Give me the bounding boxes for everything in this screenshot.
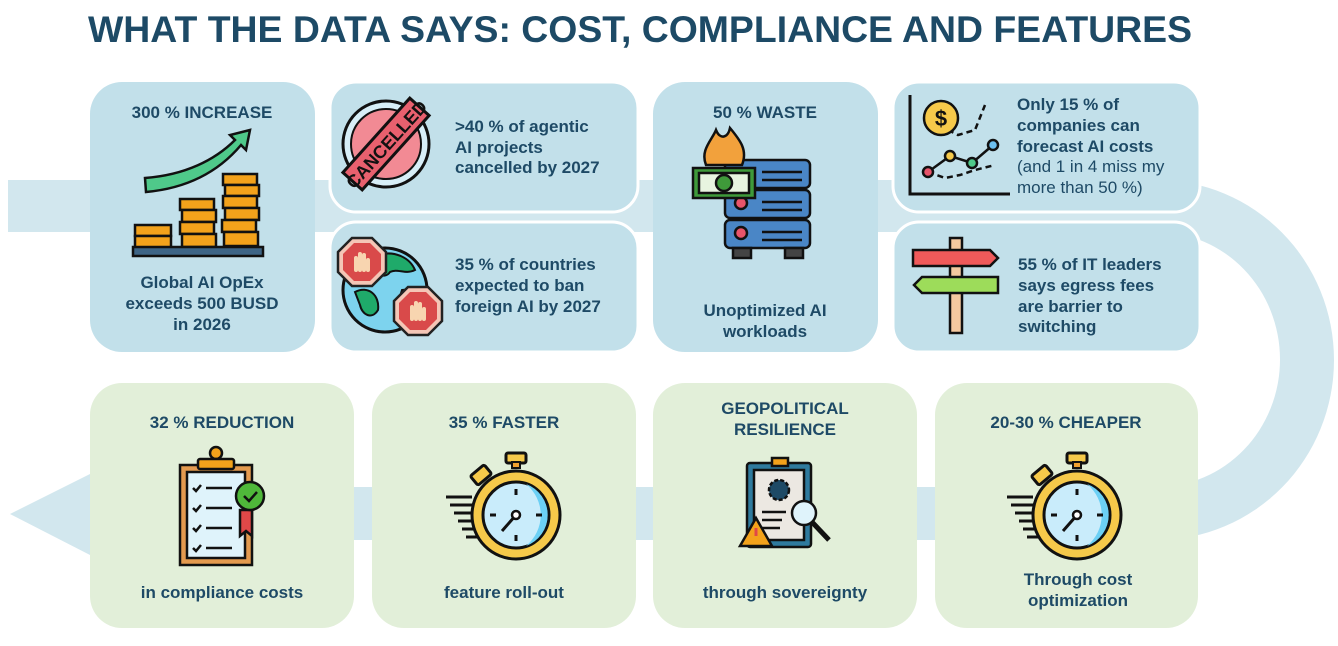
panel: 35% faster bbox=[372, 383, 636, 628]
icon: burning money server bbox=[693, 128, 810, 258]
icon: globe with stop signs bbox=[338, 238, 442, 335]
icon: signpost bbox=[913, 238, 998, 333]
panel: 50% waste bbox=[653, 82, 878, 352]
panel: countries banning foreign AI: expected to ban bbox=[455, 276, 584, 295]
panel: 32% reduction: 32 % REDUCTION bbox=[150, 413, 294, 432]
panel: egress fees bbox=[893, 222, 1200, 352]
panel: 300% increase: exceeds 500 BUSD bbox=[125, 294, 279, 313]
title: WHAT THE DATA SAYS: COST, COMPLIANCE AND FEATURES bbox=[88, 9, 1192, 50]
panel: geopolitical resilience: GEOPOLITICAL bbox=[721, 399, 849, 418]
icon: cancelled stamp: CANCELLED bbox=[342, 97, 431, 193]
panel: egress fees: 55 % of IT leaders bbox=[1018, 255, 1162, 274]
panel: forecasting AI costs: more than 50 %) bbox=[1017, 178, 1143, 197]
panel: 20-30% cheaper: optimization bbox=[1028, 591, 1128, 610]
icon: document with gear and magnifier bbox=[740, 458, 829, 547]
panel: 35% faster: feature roll-out bbox=[444, 583, 564, 602]
panel: 20-30% cheaper: Through cost bbox=[1024, 570, 1133, 589]
icon: stopwatch bbox=[1007, 453, 1121, 559]
panel: countries banning foreign AI: foreign AI by 2027 bbox=[455, 297, 601, 316]
icon: stopwatch bbox=[446, 453, 560, 559]
panel: 300% increase bbox=[90, 82, 315, 352]
panel: 50% waste: 50 % WASTE bbox=[713, 103, 817, 122]
panel: egress fees: says egress fees bbox=[1018, 276, 1154, 295]
panel: 300% increase: Global AI OpEx bbox=[140, 273, 264, 292]
panel: cancelled projects: AI projects bbox=[455, 138, 543, 157]
panel: geopolitical resilience bbox=[653, 383, 917, 628]
panel: 300% increase: 300 % INCREASE bbox=[132, 103, 272, 122]
panel: egress fees: switching bbox=[1018, 317, 1096, 336]
panel: 50% waste: workloads bbox=[722, 322, 807, 341]
panel: countries banning foreign AI bbox=[330, 222, 638, 352]
panel: countries banning foreign AI: 35 % of countries bbox=[455, 255, 596, 274]
panel: forecasting AI costs bbox=[893, 82, 1200, 212]
icon: chart with dollar bbox=[910, 95, 1010, 194]
icon: coins with arrow bbox=[133, 130, 263, 256]
panel: 32% reduction bbox=[90, 383, 354, 628]
panel: 50% waste: Unoptimized AI bbox=[703, 301, 827, 320]
panel: cancelled projects bbox=[330, 82, 638, 212]
panel: cancelled projects: >40 % of agentic bbox=[455, 117, 589, 136]
panel: geopolitical resilience: through sovereignty bbox=[703, 583, 868, 602]
panel: geopolitical resilience: RESILIENCE bbox=[734, 420, 836, 439]
icon: chart with dollar: $ bbox=[935, 106, 947, 131]
icon: clipboard with badge bbox=[180, 447, 264, 565]
panel: 32% reduction: in compliance costs bbox=[141, 583, 303, 602]
panel: 20-30% cheaper: 20-30 % CHEAPER bbox=[990, 413, 1142, 432]
panel: forecasting AI costs: forecast AI costs bbox=[1017, 137, 1153, 156]
panel: forecasting AI costs: companies can bbox=[1017, 116, 1140, 135]
panel: egress fees: are barrier to bbox=[1018, 297, 1123, 316]
flow band (background path) bbox=[8, 180, 1334, 555]
panel: forecasting AI costs: (and 1 in 4 miss my bbox=[1017, 157, 1165, 176]
panel: 35% faster: 35 % FASTER bbox=[449, 413, 559, 432]
panel: 300% increase: in 2026 bbox=[173, 315, 231, 334]
panel: cancelled projects: cancelled by 2027 bbox=[455, 158, 600, 177]
panel: forecasting AI costs: Only 15 % of bbox=[1017, 95, 1119, 114]
panel: 20-30% cheaper bbox=[935, 383, 1198, 628]
